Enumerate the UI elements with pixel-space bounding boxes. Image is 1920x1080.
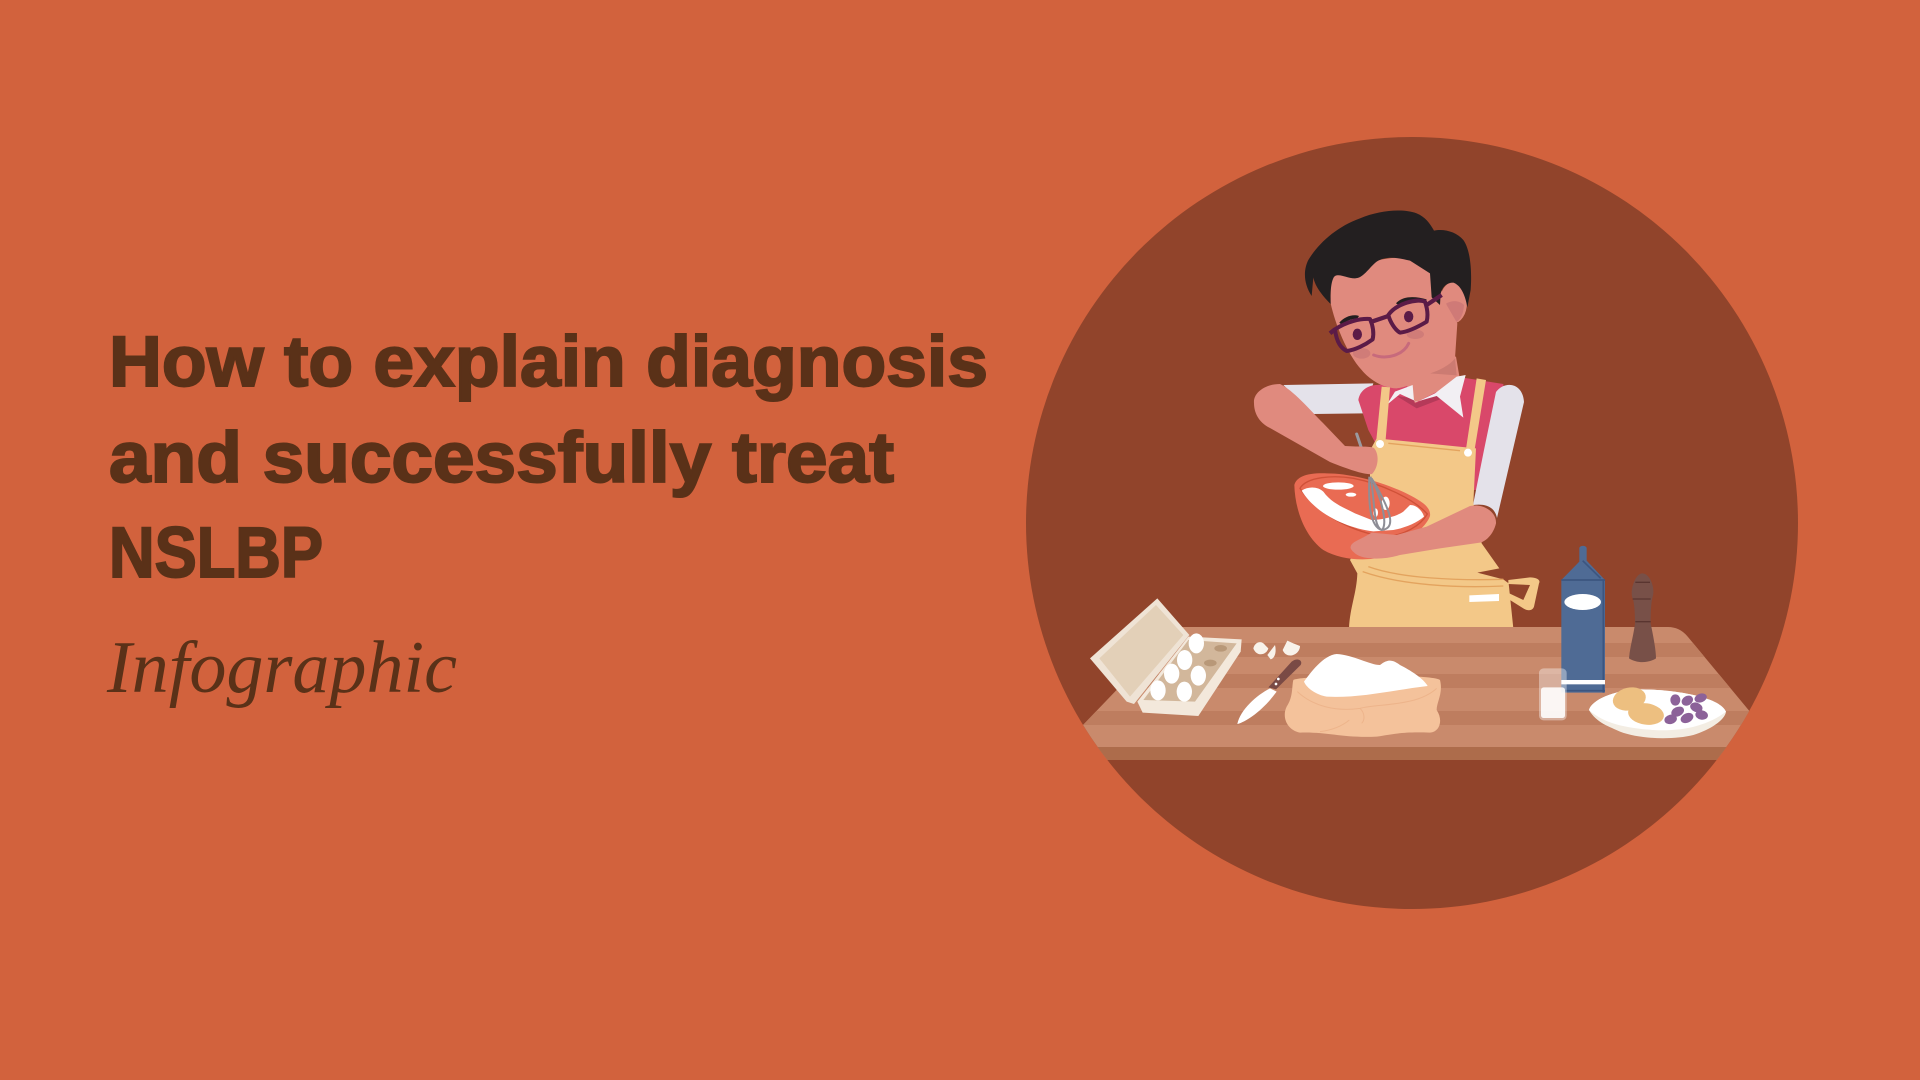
egg shells xyxy=(1253,641,1300,659)
upper body: shirt, vest, neck xyxy=(1283,357,1507,490)
glass of milk xyxy=(1539,668,1567,720)
hand holding bowl xyxy=(1351,505,1496,559)
milk carton, glass, pepper mill, plate xyxy=(1539,546,1726,738)
title: How to explain diagnosis xyxy=(109,323,988,402)
pepper mill xyxy=(1629,573,1656,662)
mixing bowl xyxy=(1294,473,1430,559)
apron, bowl, whisk and arms xyxy=(1294,434,1539,628)
background circle xyxy=(1026,137,1798,909)
apron label xyxy=(1469,594,1499,602)
illustration: cook in circle xyxy=(1026,137,1800,909)
flour sack xyxy=(1285,654,1441,737)
egg carton, shells, knife, flour sack xyxy=(1090,598,1441,737)
apron tie loop xyxy=(1508,577,1539,610)
table xyxy=(1083,627,1749,760)
title: NSLBP xyxy=(109,514,323,593)
apron straps xyxy=(1376,378,1486,453)
knife xyxy=(1237,659,1301,724)
plate of food xyxy=(1589,684,1726,738)
head with hair and glasses xyxy=(1305,211,1471,388)
right sleeve xyxy=(1473,385,1524,518)
egg carton xyxy=(1090,598,1242,716)
title: and successfully treat xyxy=(109,419,894,498)
title xyxy=(109,323,988,593)
batter xyxy=(1302,488,1424,531)
milk carton xyxy=(1561,546,1605,693)
subtitle: script word: Infographic xyxy=(106,627,457,709)
left arm xyxy=(1254,384,1378,474)
apron xyxy=(1349,438,1513,628)
cook figure xyxy=(1254,211,1539,628)
whisk xyxy=(1357,434,1363,452)
